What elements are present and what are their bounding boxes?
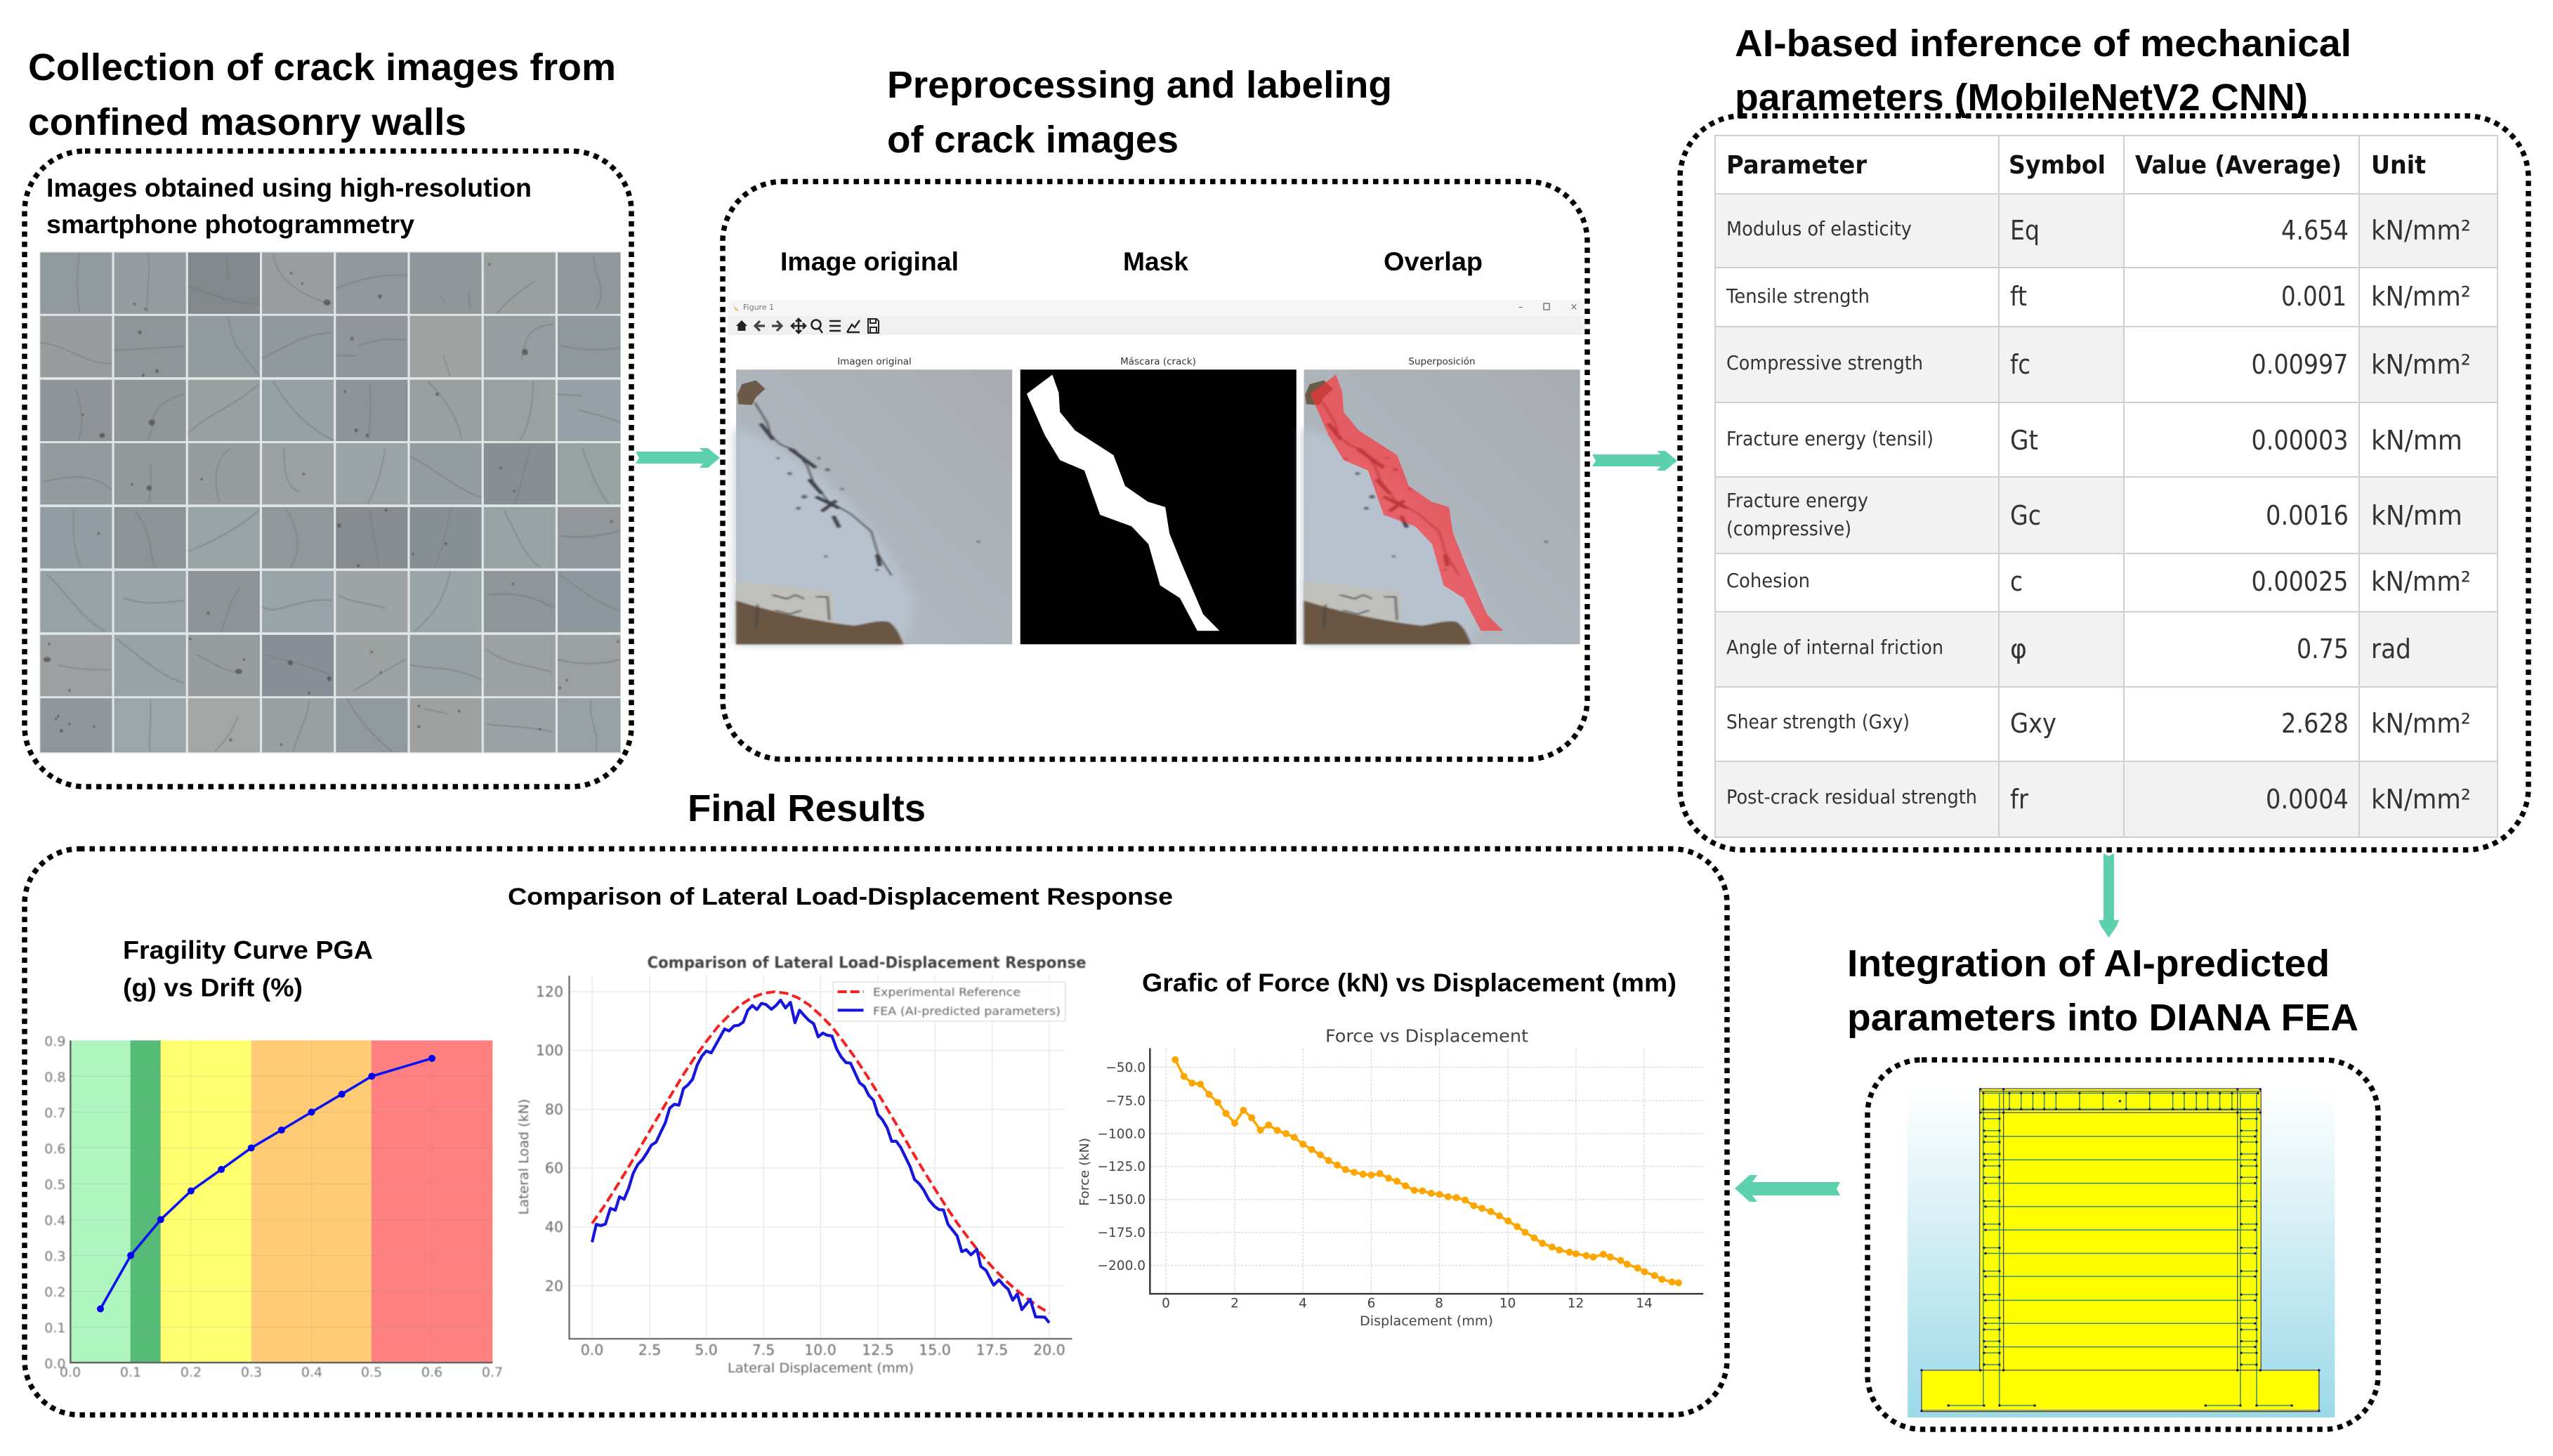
values: 0.001 xyxy=(2281,281,2347,312)
table header: Unit xyxy=(2371,151,2426,180)
plot lines xyxy=(570,976,1072,1339)
units: rad xyxy=(2371,634,2411,664)
photo: original crack xyxy=(736,369,1012,644)
chart: fragility curve xyxy=(44,936,503,1380)
axis tick labels: 0.5 xyxy=(44,1177,66,1193)
small figure captions: Superposición xyxy=(1408,356,1476,367)
table header: Value (Average) xyxy=(2135,151,2342,180)
values: 0.75 xyxy=(2297,634,2349,664)
axis labels: 60 xyxy=(545,1160,563,1176)
parameter names: Shear strength (Gxy) xyxy=(1726,710,1910,733)
panel: final results xyxy=(25,848,1727,1415)
units: kN/mm xyxy=(2371,425,2462,456)
column labels: Mask xyxy=(1123,247,1188,276)
parameter names xyxy=(1726,217,1977,808)
overlay: photo with red mask xyxy=(1304,369,1580,644)
axis tick labels: 0.5 xyxy=(361,1365,382,1380)
symbols xyxy=(2010,215,2056,815)
parameter names: Tensile strength xyxy=(1726,284,1870,308)
mask: binary crack xyxy=(1020,369,1297,644)
table header: Symbol xyxy=(2009,151,2106,180)
chart: lateral load-displacement xyxy=(516,955,1086,1376)
units: kN/mm² xyxy=(2371,566,2471,597)
units: kN/mm² xyxy=(2371,784,2471,815)
panel subtitle: Images obtained using high-resolution xyxy=(46,173,532,202)
parameter names: Post-crack residual strength xyxy=(1726,785,1977,808)
plot line and markers xyxy=(1150,1048,1703,1294)
symbols: c xyxy=(2010,566,2023,597)
small figure captions: Máscara (crack) xyxy=(1120,356,1196,367)
title: preprocessing and labeling: Preprocessing and labeling xyxy=(887,64,1392,106)
figure window toolbar: Figure 1 xyxy=(743,303,774,312)
symbols: Eq xyxy=(2010,215,2040,246)
axis labels: 5.0 xyxy=(695,1342,718,1358)
chart title: Comparison of Lateral Load-Displacement Response xyxy=(648,955,1086,972)
axis labels: 4 xyxy=(1299,1297,1307,1311)
symbols: ft xyxy=(2010,281,2027,312)
axis tick labels: 0.4 xyxy=(301,1365,322,1380)
units: kN/mm² xyxy=(2371,349,2471,380)
symbols: φ xyxy=(2010,634,2027,664)
axis tick labels: 0.3 xyxy=(241,1365,262,1380)
legend text xyxy=(873,985,1061,1018)
figure window toolbar: × xyxy=(1570,302,1577,313)
values: 4.654 xyxy=(2281,215,2349,246)
values xyxy=(2252,215,2349,815)
axis tick labels: 0.0 xyxy=(60,1365,81,1380)
parameter names: Compressive strength xyxy=(1726,351,1923,374)
axis labels: 12 xyxy=(1568,1297,1584,1311)
chart title: (g) vs Drift (%) xyxy=(123,973,303,1002)
parameter names: Angle of internal friction xyxy=(1726,636,1943,659)
units xyxy=(2371,215,2471,815)
arrow: FEA to final results xyxy=(1735,1175,1840,1202)
axis labels: 20.0 xyxy=(1033,1342,1065,1358)
axis labels: 40 xyxy=(545,1219,563,1235)
values: 0.00025 xyxy=(2252,566,2349,597)
axis tick labels: 0.8 xyxy=(44,1070,66,1085)
title: integration into DIANA FEA xyxy=(1847,943,2358,1039)
small figure captions xyxy=(837,356,1476,367)
title: final results: Final Results xyxy=(688,787,926,829)
title: integration into DIANA FEA: Integration of AI-predicted xyxy=(1847,943,2330,985)
axis labels: 17.5 xyxy=(976,1342,1008,1358)
axis labels: −125.0 xyxy=(1098,1160,1146,1174)
axis labels: 10.0 xyxy=(804,1342,836,1358)
values: 2.628 xyxy=(2281,708,2349,739)
axis tick labels: 0.6 xyxy=(44,1141,66,1157)
arrow: inference to DIANA FEA xyxy=(2099,853,2119,938)
symbols: fr xyxy=(2010,784,2028,815)
axis labels: 6 xyxy=(1367,1297,1375,1311)
symbols: Gc xyxy=(2010,500,2041,531)
arrow: preprocessing to inference xyxy=(1592,451,1677,471)
axis labels: −150.0 xyxy=(1098,1193,1146,1207)
title: collection of crack images: confined masonry walls xyxy=(28,101,466,143)
axis labels: 0 xyxy=(1162,1297,1170,1311)
panel: mechanical parameters table xyxy=(1680,116,2528,850)
axis tick labels: 0.0 xyxy=(44,1356,66,1372)
axis labels: 80 xyxy=(545,1101,563,1118)
axis labels: 2 xyxy=(1230,1297,1239,1311)
axis labels xyxy=(516,983,1065,1376)
axis labels: 100 xyxy=(536,1042,563,1059)
panel subtitle xyxy=(46,173,532,239)
table header: Parameter xyxy=(1726,151,1867,180)
chart title xyxy=(123,936,373,1002)
legend text: FEA (AI-predicted parameters) xyxy=(873,1004,1061,1018)
chart title: Fragility Curve PGA xyxy=(123,936,373,964)
axis labels: 8 xyxy=(1435,1297,1443,1311)
axis tick labels: 0.1 xyxy=(44,1320,66,1336)
figure window toolbar: – xyxy=(1518,302,1523,313)
axis labels: 14 xyxy=(1636,1297,1653,1311)
axis labels: −100.0 xyxy=(1098,1127,1146,1142)
title: preprocessing and labeling xyxy=(887,64,1392,161)
panel: preprocessing xyxy=(723,181,1587,759)
symbols: fc xyxy=(2010,349,2030,380)
axis labels: 10 xyxy=(1499,1297,1516,1311)
table xyxy=(1715,136,2498,837)
axis tick labels: 0.2 xyxy=(44,1285,66,1300)
units: kN/mm² xyxy=(2371,215,2471,246)
column labels xyxy=(780,247,1483,276)
table header xyxy=(1726,151,2426,180)
axis labels: 2.5 xyxy=(638,1342,661,1358)
panel heading: Comparison of Lateral Load-Displacement Response xyxy=(508,884,1173,910)
axis labels: 20 xyxy=(545,1278,563,1294)
axis tick labels: 0.1 xyxy=(120,1365,141,1380)
parameter names: Modulus of elasticity xyxy=(1726,217,1912,240)
axis tick labels: 0.7 xyxy=(44,1106,66,1121)
panel: crack image collection xyxy=(25,151,631,787)
axis labels xyxy=(1077,1061,1653,1329)
axis tick labels xyxy=(44,1034,503,1380)
axis tick labels: 0.3 xyxy=(44,1249,66,1264)
symbols: Gt xyxy=(2010,425,2038,456)
axis labels: Force (kN) xyxy=(1077,1138,1092,1206)
figure window toolbar xyxy=(728,300,1584,335)
symbols: Gxy xyxy=(2010,708,2056,739)
parameter names: Fracture energy xyxy=(1726,489,1868,512)
small figure captions: Imagen original xyxy=(837,356,912,367)
panel subtitle: smartphone photogrammetry xyxy=(46,210,414,239)
axis labels: −50.0 xyxy=(1105,1061,1146,1075)
axis labels: −200.0 xyxy=(1098,1259,1146,1273)
units: kN/mm² xyxy=(2371,708,2471,739)
axis labels: Lateral Displacement (mm) xyxy=(728,1360,914,1376)
parameter names: (compressive) xyxy=(1726,517,1851,540)
column labels: Overlap xyxy=(1384,247,1483,276)
chart heading: Grafic of Force (kN) vs Displacement (mm) xyxy=(1142,968,1676,997)
axis labels: 15.0 xyxy=(919,1342,951,1358)
units: kN/mm xyxy=(2371,500,2462,531)
FEA wall model xyxy=(1908,1087,2335,1417)
column labels: Image original xyxy=(780,247,959,276)
image grid: crack tiles xyxy=(39,251,621,754)
title: collection of crack images: Collection of crack images from xyxy=(28,46,616,88)
chart: force vs displacement xyxy=(1077,968,1703,1329)
title: AI-based inference: parameters (MobileNetV2 CNN) xyxy=(1735,77,2308,119)
legend text: Experimental Reference xyxy=(873,985,1020,999)
chart subtitle: Force vs Displacement xyxy=(1325,1025,1528,1047)
parameter names: Fracture energy (tensil) xyxy=(1726,427,1934,450)
title: collection of crack images xyxy=(28,46,616,143)
values: 0.00997 xyxy=(2252,349,2349,380)
axis labels: −75.0 xyxy=(1105,1094,1146,1108)
title: integration into DIANA FEA: parameters into DIANA FEA xyxy=(1847,997,2358,1039)
axis tick labels: 0.6 xyxy=(421,1365,442,1380)
axis labels: Displacement (mm) xyxy=(1360,1314,1493,1329)
values: 0.0016 xyxy=(2266,500,2349,531)
title: AI-based inference: AI-based inference of mechanical xyxy=(1735,22,2351,65)
axis tick labels: 0.2 xyxy=(181,1365,202,1380)
parameter names: Cohesion xyxy=(1726,569,1810,592)
title: preprocessing and labeling: of crack images xyxy=(887,119,1179,161)
axis tick labels: 0.4 xyxy=(44,1213,66,1228)
axis labels: 7.5 xyxy=(752,1342,775,1358)
axis labels: −175.0 xyxy=(1098,1226,1146,1240)
axis tick labels: 0.9 xyxy=(44,1034,66,1049)
arrow: collection to preprocessing xyxy=(636,448,720,468)
axis labels: 12.5 xyxy=(862,1342,894,1358)
units: kN/mm² xyxy=(2371,281,2471,312)
title: AI-based inference xyxy=(1735,22,2351,119)
axis labels: Lateral Load (kN) xyxy=(516,1098,532,1215)
values: 0.00003 xyxy=(2252,425,2349,456)
axis labels: 120 xyxy=(536,983,563,1000)
axis tick labels: 0.7 xyxy=(482,1365,503,1380)
axis labels: 0.0 xyxy=(581,1342,603,1358)
panel: DIANA FEA model xyxy=(1868,1060,2378,1429)
values: 0.0004 xyxy=(2266,784,2349,815)
damage bands and curve xyxy=(70,1040,492,1363)
